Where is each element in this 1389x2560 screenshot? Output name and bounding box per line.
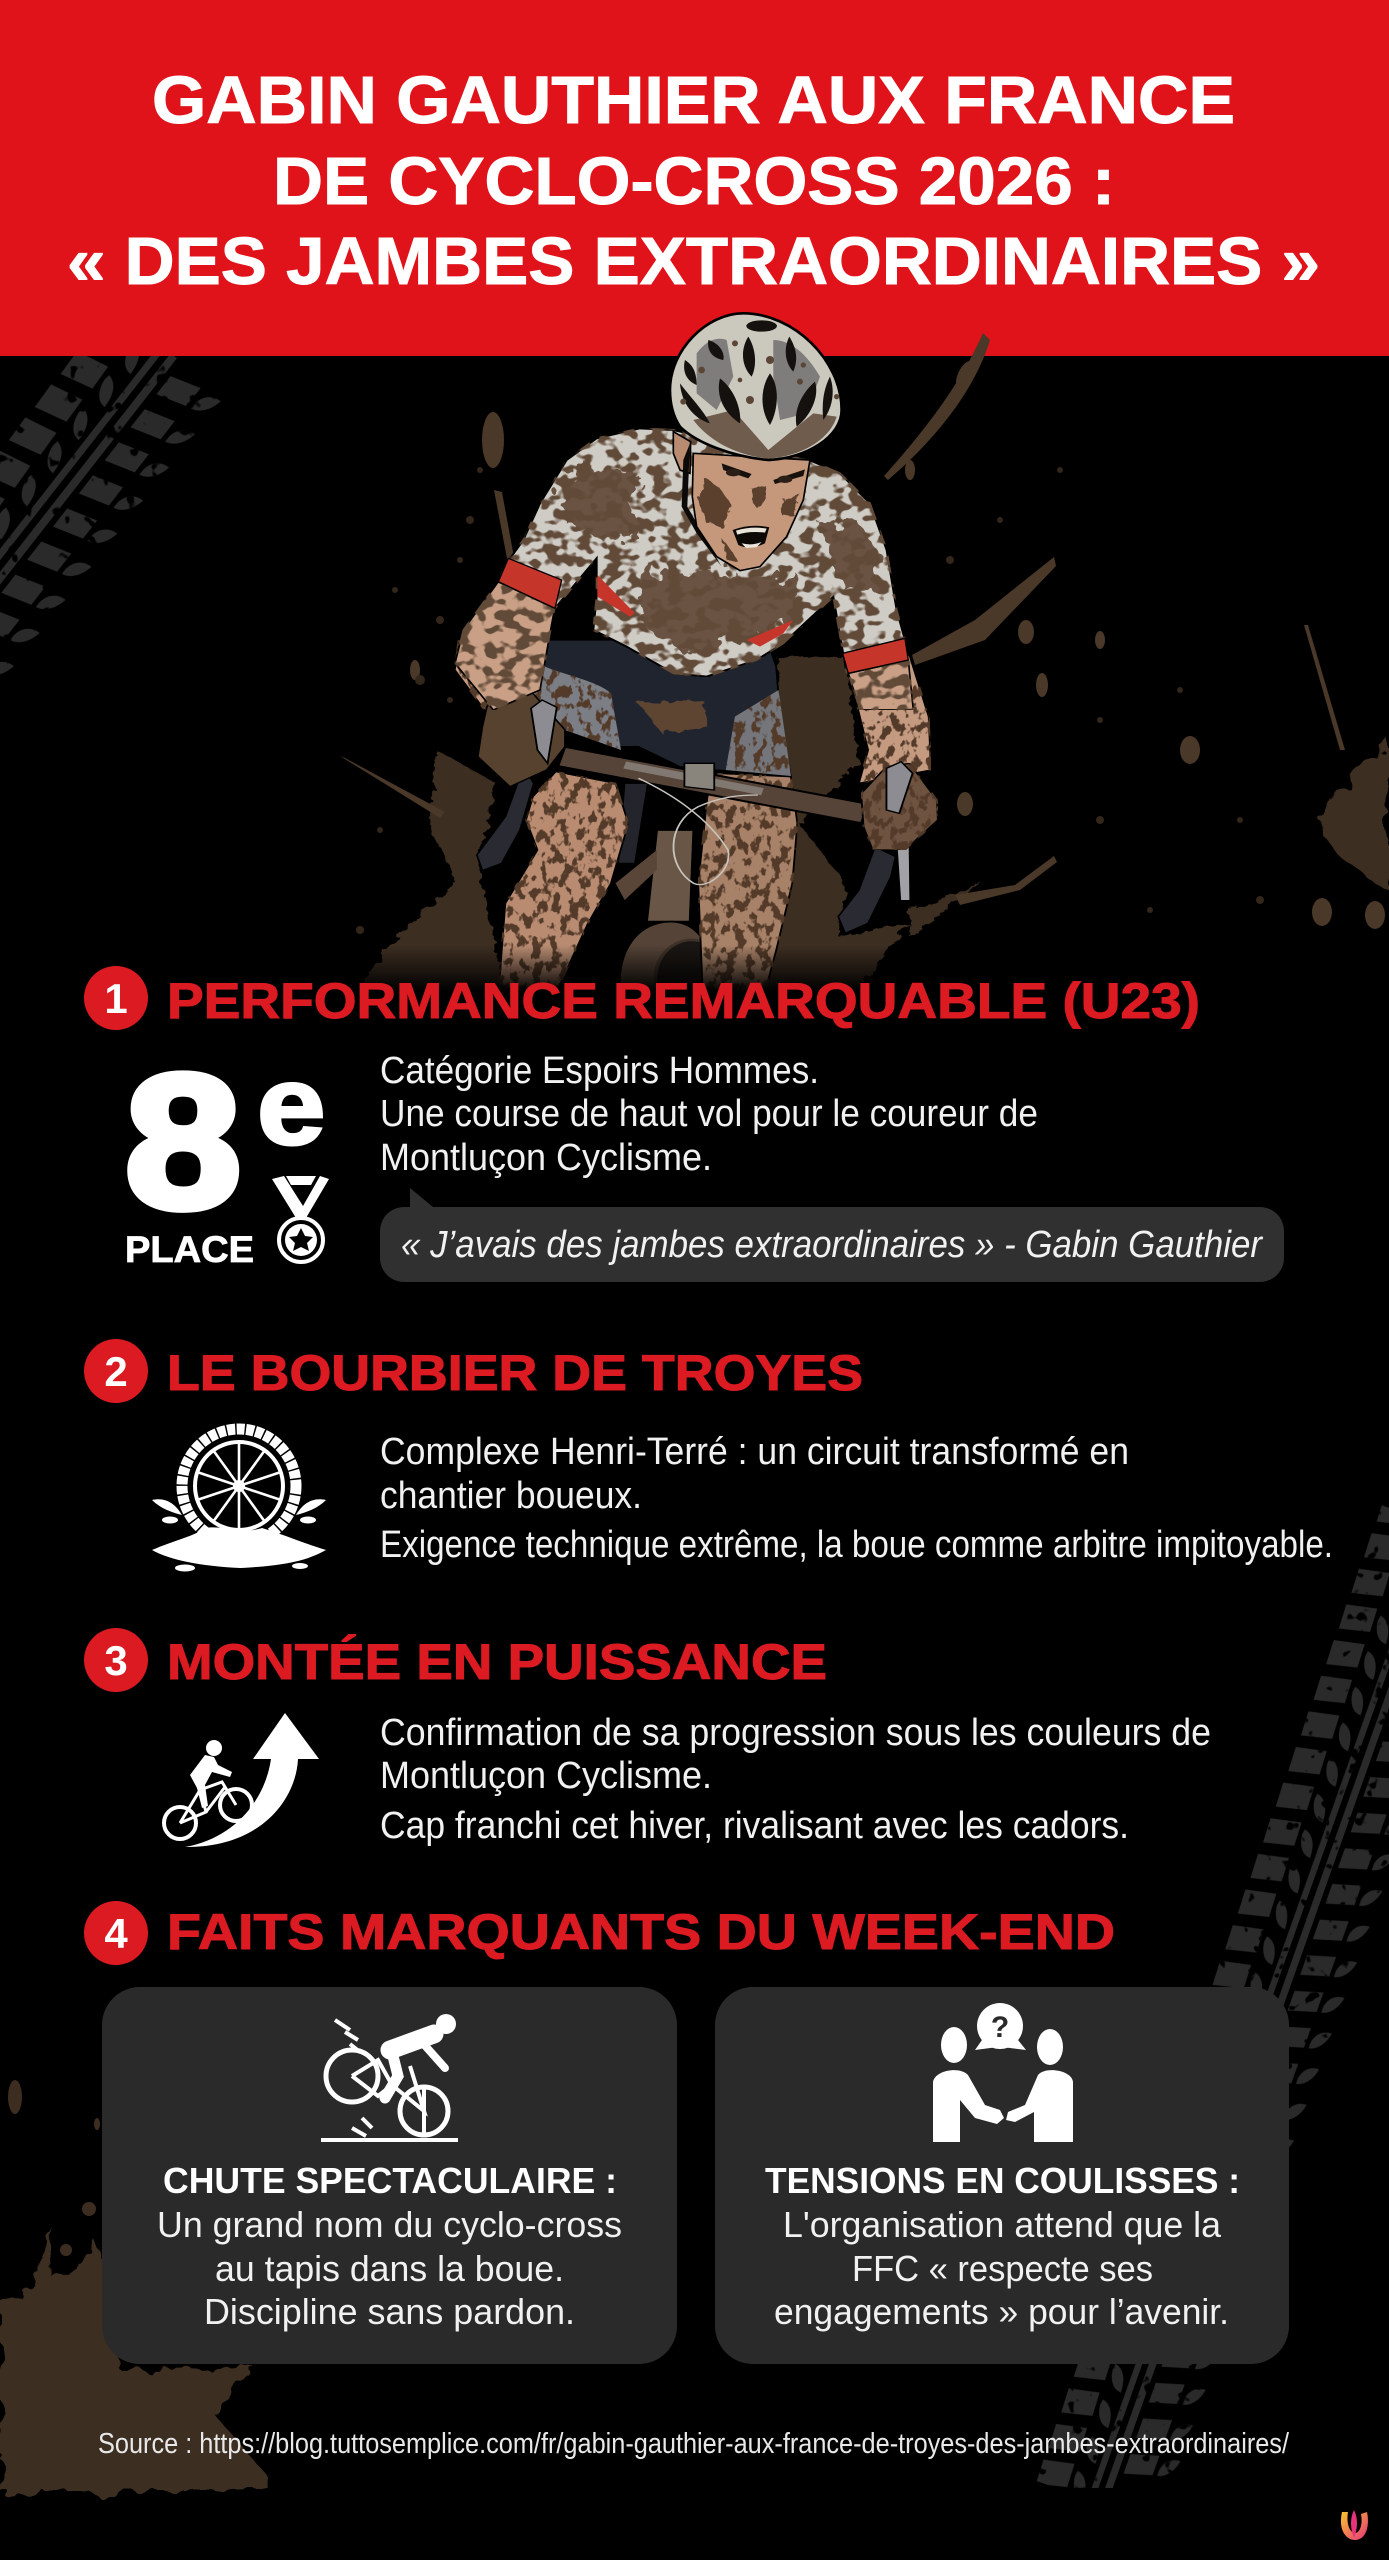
mud splash behind cyclist [340, 333, 1385, 993]
right forearm [847, 655, 931, 783]
stat: 8e place: 8 [125, 1036, 241, 1248]
section 2 text: chantier boueux. [380, 1475, 642, 1517]
right brake lever [838, 847, 896, 933]
upper arm right skin [848, 660, 913, 710]
icon: muddy wheel [152, 1429, 326, 1572]
illustration fade [0, 945, 1389, 992]
section 2 text: Complexe Henri-Terré : un circuit transformé en [380, 1431, 1129, 1473]
section 1 heading: PERFORMANCE REMARQUABLE (U23) [167, 973, 1200, 1029]
tire track: top left [0, 356, 220, 674]
title [67, 63, 1320, 299]
right leg [698, 773, 797, 993]
left glove [478, 688, 565, 787]
jersey [498, 428, 908, 677]
card: tensions en coulisses: FFC « respecte ses [852, 2248, 1153, 2289]
icon: crash [321, 2014, 458, 2142]
left brake lever [476, 778, 533, 870]
card: tensions en coulisses: L'organisation attend que la [783, 2204, 1222, 2245]
section 3 text: Cap franchi cet hiver, rivalisant avec les cadors. [380, 1805, 1129, 1847]
card: chute spectaculaire: Discipline sans pardon. [204, 2291, 575, 2332]
section 4 heading: 4 [104, 1910, 128, 1957]
section 2 text [380, 1431, 1333, 1566]
left forearm [454, 640, 488, 710]
helmet [670, 313, 842, 460]
section 2 heading: 2 [104, 1348, 128, 1395]
card: tensions en coulisses: TENSIONS EN COULISSES : [765, 2160, 1240, 2201]
card: chute spectaculaire [102, 1987, 677, 2364]
card: chute spectaculaire: CHUTE SPECTACULAIRE : [163, 2160, 617, 2201]
right hood [886, 762, 913, 813]
icon: two people and question bubble [933, 2003, 1073, 2142]
section 3 heading: MONTÉE EN PUISSANCE [167, 1634, 827, 1690]
card: chute spectaculaire: Un grand nom du cyclo-cross [157, 2204, 622, 2245]
section 1 text: Catégorie Espoirs Hommes. [380, 1050, 819, 1092]
cyclist illustration [455, 313, 938, 1017]
icon: rising arrow with cyclist [164, 1713, 319, 1847]
red arm bands [498, 558, 908, 673]
quote bubble: « J’avais des jambes extraordinaires » - Gabin Gauthier [401, 1224, 1263, 1266]
card: tensions en coulisses: engagements » pour l’avenir. [774, 2291, 1229, 2332]
section 1 text [380, 1050, 1038, 1179]
section 3 text [380, 1712, 1211, 1847]
lower body: legs, bike, hands [455, 640, 938, 1017]
section 3 text: Confirmation de sa progression sous les couleurs de [380, 1712, 1211, 1754]
section 1 text: Montluçon Cyclisme. [380, 1137, 712, 1179]
face [692, 453, 810, 571]
upper body: jersey, head, helmet [455, 313, 913, 710]
left leg [498, 772, 628, 993]
section 2 heading: LE BOURBIER DE TROYES [167, 1345, 863, 1401]
stat: 8e place [125, 1036, 326, 1270]
upper arm left skin [455, 582, 555, 710]
section 4 heading: FAITS MARQUANTS DU WEEK-END [167, 1904, 1115, 1960]
mud stains: lower left and right [0, 740, 1389, 2492]
stat: 8e place: e [257, 1042, 326, 1168]
left hood [531, 700, 557, 763]
section 1 heading: 1 [104, 975, 128, 1022]
stat: 8e place: PLACE [125, 1229, 254, 1270]
card: chute spectaculaire: au tapis dans la boue. [215, 2248, 564, 2289]
handlebar [563, 757, 863, 885]
tire track: bottom right [1034, 1505, 1389, 2525]
card: tensions en coulisses [715, 1987, 1289, 2364]
quote bubble [380, 1188, 1284, 1282]
ear and neck [673, 432, 722, 567]
icon: medal [272, 1176, 329, 1262]
shorts [533, 640, 791, 777]
bike frame and front wheel [616, 784, 701, 988]
red title band [0, 0, 1389, 356]
icon: two people and question bubble: ? [991, 2011, 1009, 2044]
watermark logo [1341, 2510, 1368, 2540]
jersey red stripes [597, 575, 793, 647]
title: DE CYCLO-CROSS 2026 : [273, 144, 1115, 219]
section 3 heading: 3 [104, 1637, 128, 1684]
section 3 text: Montluçon Cyclisme. [380, 1755, 712, 1797]
title: GABIN GAUTHIER AUX FRANCE [152, 63, 1235, 138]
title: « DES JAMBES EXTRAORDINAIRES » [67, 224, 1320, 299]
right glove [861, 763, 938, 850]
section 1 text: Une course de haut vol pour le coureur de [380, 1093, 1038, 1135]
